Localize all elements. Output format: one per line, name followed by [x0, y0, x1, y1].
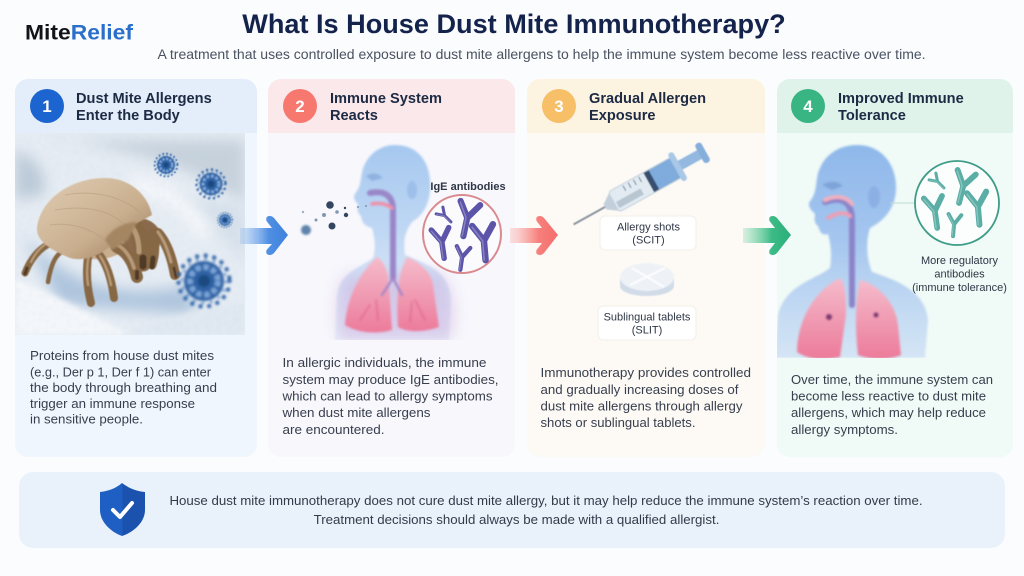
- step 2 header: 2: [295, 97, 305, 116]
- step 1 description: Proteins from house dust mites: [30, 348, 214, 363]
- arrow: step 2 to 3: [510, 216, 558, 255]
- step 3 description: Immunotherapy provides controlled: [540, 365, 751, 380]
- label: sublingual tablets: Sublingual tablets: [604, 312, 691, 324]
- lungs: [345, 257, 392, 332]
- panel: step 4: [775, 79, 1013, 457]
- arrow: step 3 to 4: [743, 216, 791, 255]
- panel: step 3: [527, 79, 765, 457]
- step 3 header: 3: [554, 97, 564, 116]
- title: What Is House Dust Mite Immunotherapy?: [242, 8, 786, 39]
- subtitle: A treatment that uses controlled exposure to dust mite allergens to help the immune system become less reactive over time.: [157, 46, 926, 62]
- IgE antibodies circle: [423, 195, 501, 273]
- arrow: step 1 to 2: [240, 216, 288, 255]
- callout: safety note: [19, 472, 1005, 548]
- allergen particles: [155, 154, 232, 307]
- step 4 description: allergy symptoms.: [791, 422, 898, 437]
- illustration: human airway and lungs, tolerant: [775, 145, 928, 359]
- step 1 description: the body through breathing and: [30, 380, 217, 395]
- step 4 header: Improved Immune: [838, 91, 964, 107]
- step 1 header: [15, 79, 257, 133]
- mite legs: [25, 222, 176, 303]
- step 1 header: Dust Mite Allergens: [76, 91, 212, 107]
- airway: [360, 192, 425, 322]
- step 1 header: 1: [42, 97, 52, 116]
- step 4 description: allergens, which may help reduce: [791, 405, 986, 420]
- step 4 description: become less reactive to dust mite: [791, 388, 986, 404]
- step 1 description: in sensitive people.: [30, 412, 143, 426]
- face details: [822, 182, 880, 208]
- label: allergy shots: (SCIT): [632, 234, 665, 246]
- inhaled allergen particles: [301, 201, 367, 235]
- step 2 header: Reacts: [330, 108, 378, 124]
- regulatory antibodies label: More regulatory: [921, 255, 999, 267]
- logo: MiteRelief: [25, 20, 134, 44]
- step 3 description: dust mite allergens through allergy: [540, 398, 743, 414]
- step 2 description: system may produce IgE antibodies,: [282, 372, 498, 387]
- panel: step 1: [15, 79, 257, 457]
- step 2 header: [268, 79, 515, 133]
- step 1 header: Enter the Body: [76, 108, 181, 124]
- IgE antibodies label: IgE antibodies: [430, 181, 506, 193]
- step 4 header: [777, 79, 1013, 133]
- mite underbody and head: [91, 218, 160, 260]
- icon: syringe: [566, 137, 713, 238]
- step 1 description: trigger an immune response: [30, 396, 195, 411]
- step 1 description: (e.g., Der p 1, Der f 1) can enter: [30, 364, 212, 380]
- mite body: [37, 178, 152, 259]
- lungs: [797, 278, 846, 359]
- illustration: dust mite on fabric with allergen particles: [15, 133, 245, 335]
- label: sublingual tablets: (SLIT): [632, 324, 662, 336]
- step 2 description: which can lead to allergy symptoms: [281, 388, 493, 404]
- step 2 description: are encountered.: [282, 422, 384, 437]
- callout text: House dust mite immunotherapy does not cure dust mite allergy, but it may help reduce the immune system’s reaction over time.: [169, 493, 923, 508]
- step 3 description: and gradually increasing doses of: [540, 382, 739, 397]
- step 3 header: Exposure: [589, 108, 656, 124]
- step 3 header: Gradual Allergen: [589, 91, 706, 107]
- callout text: Treatment decisions should always be made with a qualified allergist.: [314, 512, 719, 527]
- step 4 description: Over time, the immune system can: [791, 372, 993, 387]
- regulatory antibodies label: (immune tolerance): [912, 282, 1007, 294]
- step 2 header: Immune System: [330, 91, 442, 107]
- step 4 header: Tolerance: [838, 108, 906, 124]
- airway: [825, 197, 878, 320]
- step 3 header: [527, 79, 765, 133]
- label: allergy shots: Allergy shots: [617, 222, 680, 234]
- illustration: human airway and lungs: [335, 145, 455, 340]
- face details: [366, 174, 417, 199]
- connector line: [890, 202, 915, 204]
- regulatory antibodies label: antibodies: [934, 268, 985, 280]
- step 3 description: shots or sublingual tablets.: [540, 415, 696, 430]
- step 2 description: In allergic individuals, the immune: [282, 355, 486, 370]
- label: sublingual tablets: [598, 306, 696, 340]
- step 4 header: 4: [803, 97, 813, 116]
- icon: tablet: [620, 263, 674, 296]
- step 2 description: when dust mite allergens: [281, 405, 431, 420]
- panel: step 2: [268, 79, 515, 457]
- label: allergy shots: [600, 216, 696, 250]
- icon: shield with check: [100, 483, 145, 536]
- regulatory antibodies circle: [915, 161, 999, 245]
